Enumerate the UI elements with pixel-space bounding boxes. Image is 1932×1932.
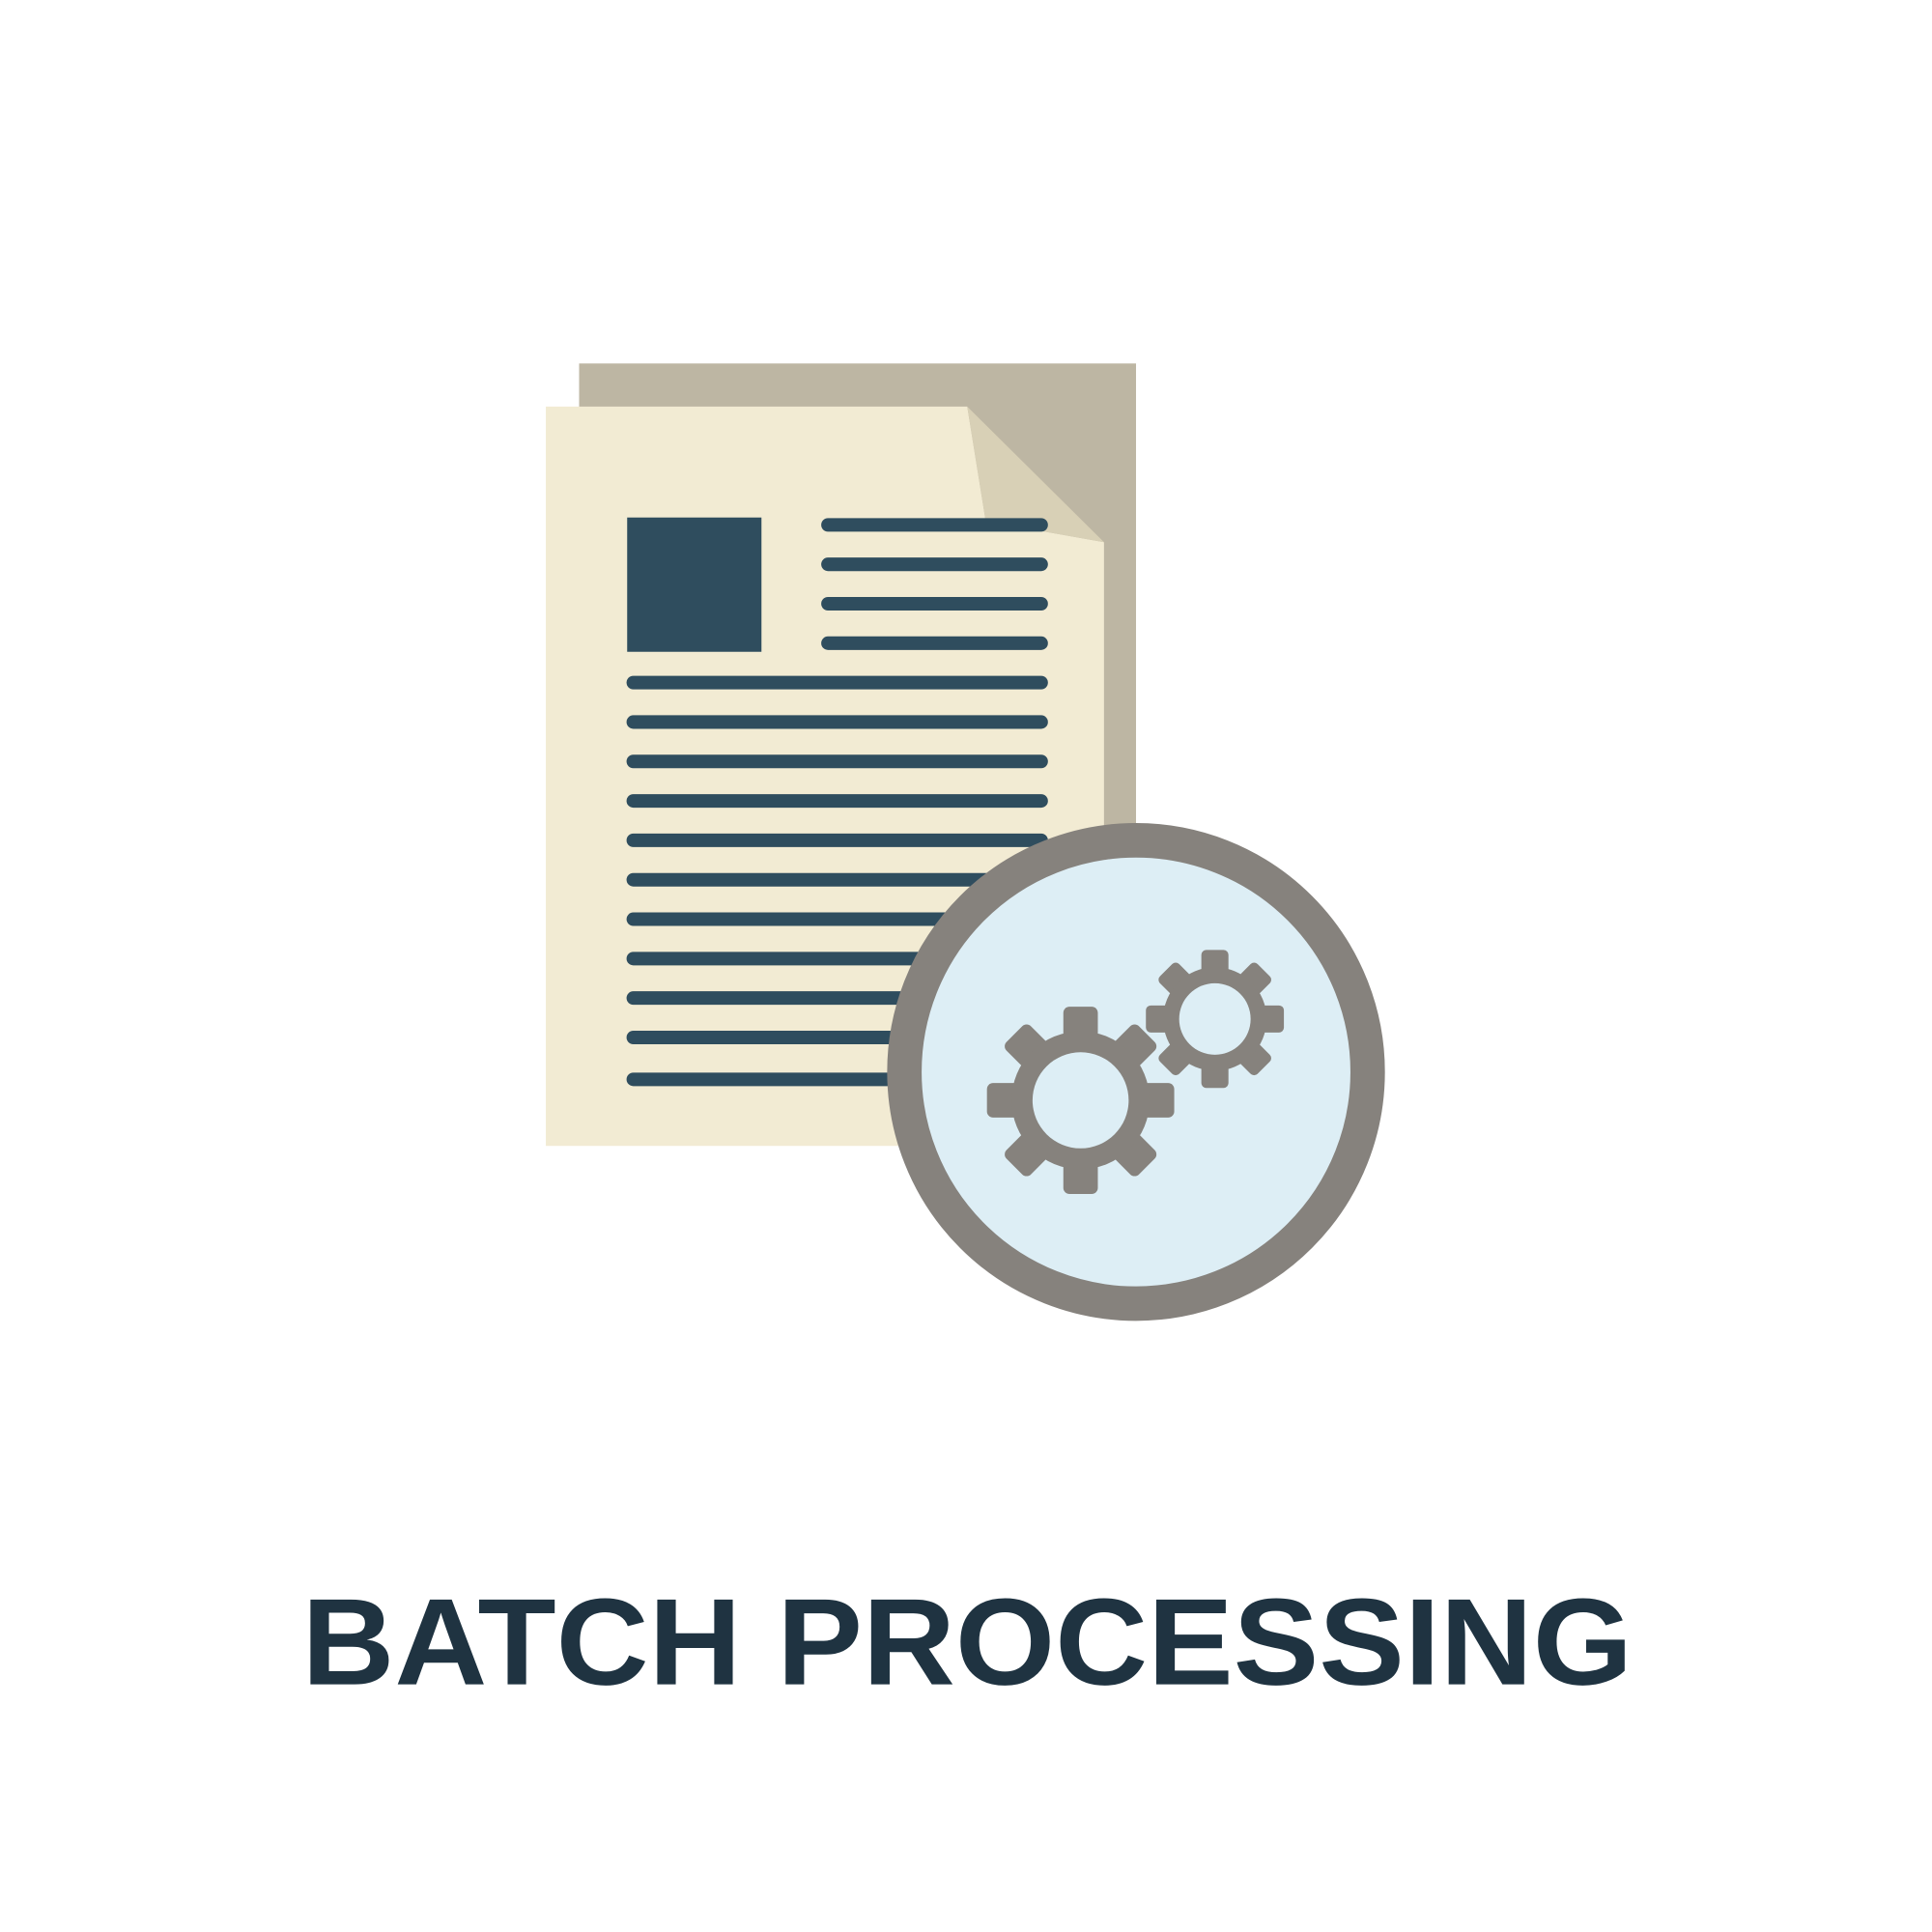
icon: document stack — [546, 363, 1136, 1146]
small gear — [1146, 950, 1284, 1088]
front sheet — [546, 407, 1104, 1146]
text lines — [634, 525, 1041, 1079]
back sheet — [579, 363, 1136, 1054]
big gear — [987, 1007, 1175, 1194]
title: BATCH PROCESSING — [301, 1575, 1633, 1712]
folded corner — [967, 407, 1104, 542]
icon: gears badge — [904, 840, 1368, 1303]
image block — [627, 518, 761, 652]
